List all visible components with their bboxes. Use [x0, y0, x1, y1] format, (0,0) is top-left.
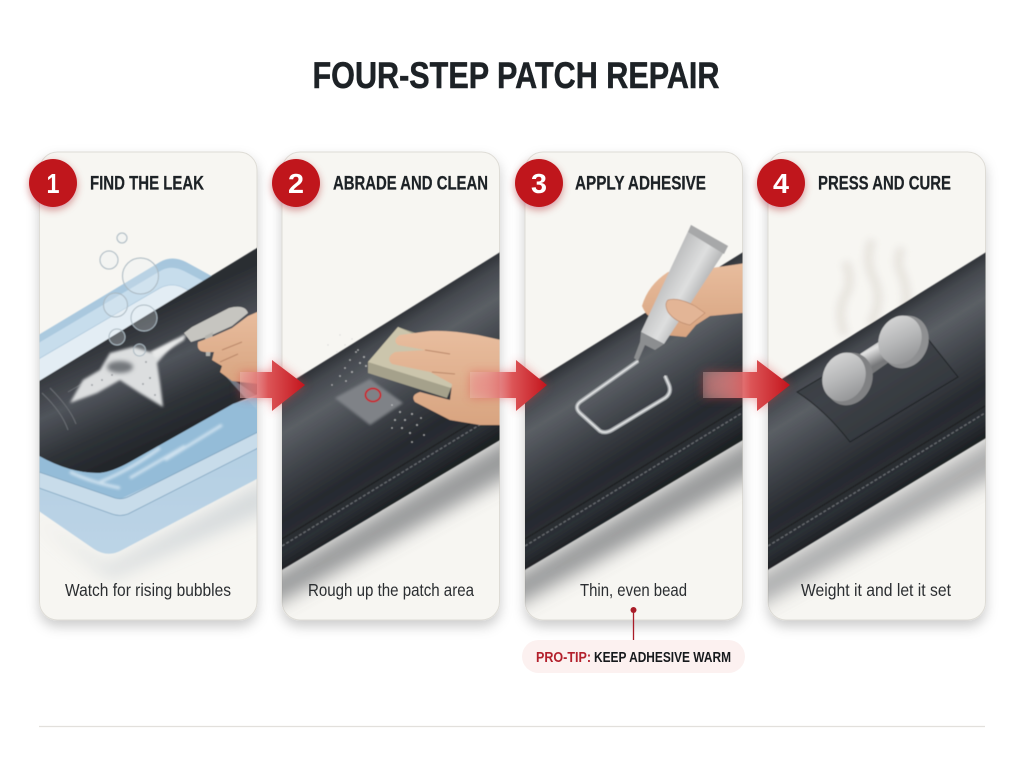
- arrow: step 2 to 3: [470, 360, 547, 411]
- callout: pro-tip: [522, 607, 745, 673]
- hand: [389, 331, 510, 425]
- tube: [282, 252, 500, 570]
- dumbbell weight: [821, 314, 930, 406]
- callout: pro-tip: PRO-TIP:: [536, 650, 591, 666]
- illustration: weight on patch: [768, 240, 986, 611]
- step 2 heading: ABRADE AND CLEAN: [333, 174, 488, 194]
- step 2 caption: Rough up the patch area: [308, 580, 474, 600]
- tube: [525, 252, 742, 570]
- soap foam: [70, 340, 177, 407]
- step 4 caption: Weight it and let it set: [801, 580, 951, 600]
- inflatable tube: [39, 240, 270, 473]
- adhesive bead: [577, 361, 670, 432]
- patch: [797, 339, 958, 442]
- step badge 2: [272, 159, 320, 207]
- step badge 2: 2: [288, 168, 304, 199]
- glue tube: [634, 225, 728, 361]
- step badge 4: 4: [773, 168, 789, 199]
- panel: step 3 apply adhesive: [505, 152, 763, 620]
- step badge 3: [515, 159, 563, 207]
- illustration: tube in water tray with spray: [30, 233, 270, 578]
- step badge 1: [29, 159, 77, 207]
- hand: [198, 310, 262, 384]
- illustration: adhesive tube on inflatable: [525, 224, 742, 612]
- step 3 caption: Thin, even bead: [580, 580, 687, 600]
- step 4 heading: PRESS AND CURE: [818, 174, 951, 194]
- step badge 1: 1: [46, 168, 60, 199]
- water tray: [30, 258, 270, 554]
- bubbles: [100, 233, 158, 356]
- step 3 heading: APPLY ADHESIVE: [575, 174, 706, 194]
- title: FOUR-STEP PATCH REPAIR: [312, 55, 720, 96]
- panel: step 1 find the leak: [29, 152, 270, 620]
- sanding block: [368, 327, 451, 398]
- tube: [768, 252, 986, 570]
- callout: pro-tip: KEEP ADHESIVE WARM: [594, 650, 731, 666]
- step 1 heading: FIND THE LEAK: [90, 174, 204, 194]
- arrow: step 1 to 2: [240, 360, 305, 411]
- thumb: [666, 299, 705, 325]
- spray bottle: [184, 307, 248, 342]
- leak marker: [366, 388, 380, 402]
- step badge 3: 3: [531, 168, 547, 199]
- steam: [841, 240, 907, 335]
- hand behind: [642, 262, 753, 337]
- arrow: step 3 to 4: [703, 360, 790, 411]
- step badge 4: [757, 159, 805, 207]
- step 1 caption: Watch for rising bubbles: [65, 580, 231, 600]
- sanding dust: [327, 334, 425, 443]
- panel: step 4 press and cure: [748, 152, 1006, 620]
- panel: step 2 abrade and clean: [262, 152, 520, 620]
- illustration: sanding block on tube: [282, 252, 500, 612]
- abraded area: [335, 379, 403, 425]
